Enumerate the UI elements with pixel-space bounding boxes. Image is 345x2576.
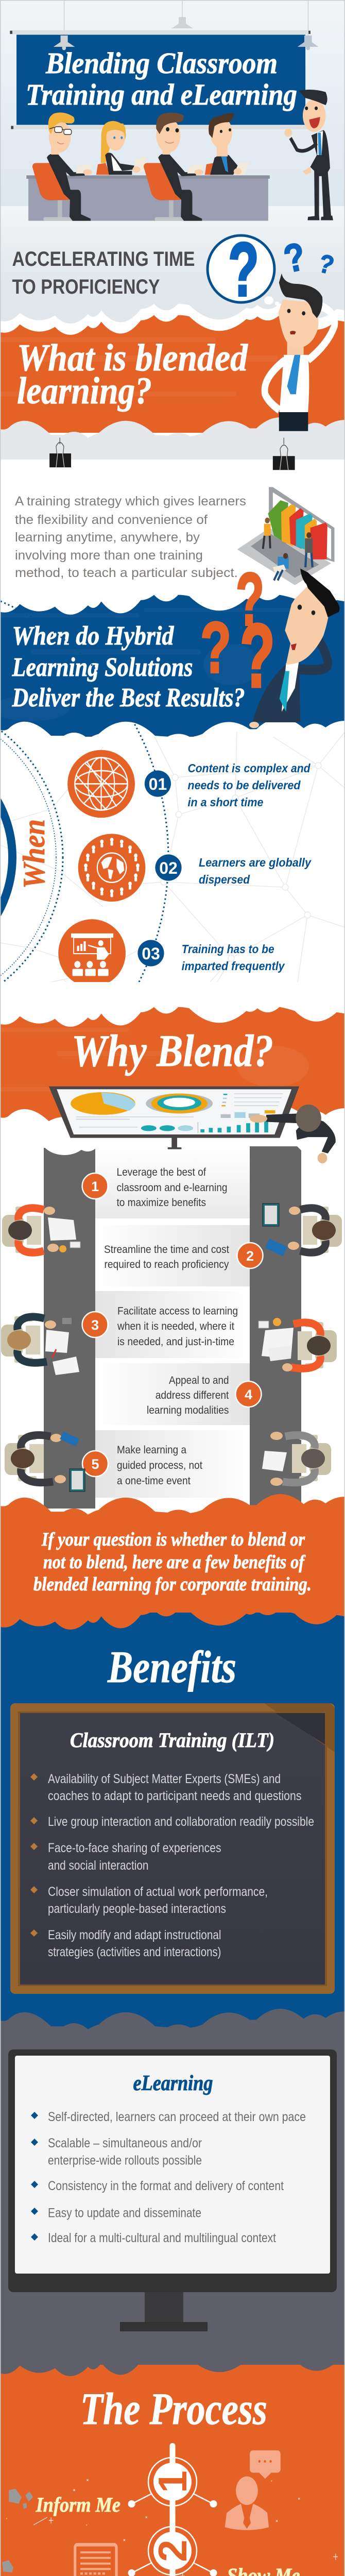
illustration: person touching monitor	[250, 1105, 336, 1163]
illustration: seated students	[32, 112, 249, 221]
icon: thought bubble with question marks	[208, 227, 337, 312]
decorative rocks	[2, 2489, 336, 2576]
badges: numbers 1 to 5	[82, 1173, 263, 1477]
icon: speaker person	[225, 2477, 269, 2530]
illustration: trousers of puzzled man	[279, 412, 308, 428]
heading: why blend: Why Blend?	[72, 1026, 273, 1076]
list: elearning benefits: Self-directed, learners can proceed at their own pace	[48, 2110, 306, 2124]
heading: accelerating time to proficiency	[12, 248, 195, 298]
illustration: presenter	[284, 90, 333, 221]
list: why blend reasons: Appeal to and	[169, 1375, 229, 1386]
illustration: meeting participant grey right	[262, 1432, 331, 1486]
diagram: dotted and solid arcs	[0, 578, 168, 1137]
icon: content network sphere	[67, 750, 135, 818]
list: why blend reasons: classroom and e-learning	[116, 1182, 228, 1194]
badges: numbers 1 to 5: 5	[91, 1456, 99, 1472]
diagram: process timeline	[128, 2443, 217, 2576]
text: if your question: If your question is whether to blend or	[41, 1529, 305, 1550]
text: if your question: blended learning for corporate training.	[33, 1574, 312, 1595]
text: learners dispersed: Learners are globally	[199, 856, 312, 869]
heading: accelerating time to proficiency: TO PROFICIENCY	[12, 276, 160, 298]
title: Training and eLearning	[26, 78, 297, 111]
labels: process steps: Inform Me	[36, 2493, 120, 2516]
illustration: wall monitor with charts	[49, 1087, 299, 1149]
list: elearning benefits: Consistency in the format and delivery of content	[48, 2179, 284, 2193]
illustration: meeting participant teal left	[1, 1316, 79, 1375]
illustration: classroom desk	[26, 175, 270, 221]
text block: definition of blended learning: method, to teach a particular subject.	[15, 566, 238, 580]
heading: benefits: Benefits	[107, 1642, 236, 1692]
list: classroom benefits: Face-to-face sharing of experiences	[48, 1841, 221, 1855]
text block: definition of blended learning: learning anytime, anywhere, by	[15, 530, 200, 545]
list: why blend reasons: a one-time event	[117, 1475, 191, 1487]
icon: binder clips	[49, 437, 295, 470]
list: classroom benefits: particularly people-based interactions	[48, 1902, 226, 1916]
panel: orange what is blended learning band	[0, 279, 345, 433]
badges: numbers 1 to 5: 4	[245, 1387, 252, 1402]
illustration: worried man with question marks: ?	[200, 607, 231, 688]
text: training frequently	[182, 942, 285, 973]
ceiling lights and rods	[64, 0, 308, 36]
badge: 02: 02	[159, 859, 178, 877]
text: learners dispersed: dispersed	[199, 873, 250, 886]
illustration: laptop with books	[237, 487, 334, 585]
icon: presenter with audience	[58, 919, 126, 987]
icon: speech bubble	[250, 2450, 281, 2479]
labels: process steps	[12, 2493, 307, 2576]
list: classroom benefits: strategies (activities and interactions)	[48, 1945, 221, 1959]
decorative stars and dots	[6, 2479, 343, 2576]
list: elearning benefits: Scalable – simultaneous and/or	[48, 2136, 202, 2150]
icon: globe and people	[78, 834, 145, 902]
list: why blend reasons: to maximize benefits	[116, 1197, 206, 1209]
list: why blend reasons: Facilitate access to learning	[117, 1306, 238, 1317]
list: why blend reasons: Leverage the best of	[116, 1166, 206, 1178]
badges: numbers 1 to 5: 1	[91, 1179, 99, 1194]
icon: tablet with hand	[75, 2545, 120, 2576]
list: why blend reasons	[104, 1166, 238, 1487]
panel: grey band above definition	[0, 417, 345, 614]
list: classroom benefits: coaches to adapt to participant needs and questions	[48, 1789, 302, 1803]
text: training frequently: Training has to be	[182, 942, 274, 956]
heading: when do hybrid learning solutions deliver the best results: When do Hybrid	[12, 621, 174, 651]
icon: thought bubble with question marks: ?	[228, 227, 259, 312]
list: elearning benefits: enterprise-wide rollouts possible	[48, 2154, 202, 2168]
title	[26, 46, 297, 111]
badge: 03: 03	[142, 944, 160, 963]
heading: accelerating time to proficiency: ACCELERATING TIME	[12, 248, 195, 270]
panel: elearning monitor	[8, 2049, 337, 2334]
illustration: meeting participant red right	[258, 1318, 337, 1371]
text block: definition of blended learning	[15, 494, 246, 580]
badge: 01: 01	[149, 775, 167, 793]
illustration: worried man with question marks: ?	[240, 606, 275, 706]
illustration: meeting participant red left	[2, 1207, 80, 1253]
list: why blend reasons: learning modalities	[147, 1404, 229, 1416]
list: classroom benefits: Availability of Subject Matter Experts (SMEs) and	[48, 1772, 281, 1786]
illustration: meeting participant dark left with tablet	[5, 1432, 85, 1492]
text block: definition of blended learning: involving more than one training	[15, 548, 203, 563]
list: why blend reasons: guided process, not	[117, 1460, 202, 1471]
title: Blending Classroom	[45, 46, 278, 80]
step 1	[128, 2458, 217, 2507]
text: training frequently: imparted frequently	[182, 959, 285, 973]
panel: white spacer above orange why blend band	[0, 992, 345, 1008]
text block: definition of blended learning: the flexibility and convenience of	[15, 513, 208, 527]
list: why blend reasons: when it is needed, where it	[117, 1320, 234, 1332]
panel: blue when do hybrid band	[0, 570, 345, 776]
timeline stem	[170, 2443, 175, 2576]
text: if your question: not to blend, here are a few benefits of	[43, 1552, 306, 1573]
text: content is complex: needs to be delivered	[187, 778, 301, 792]
badges: numbers 1 to 5: 3	[91, 1317, 99, 1333]
projection banner	[10, 30, 318, 129]
heading: classroom training ILT: Classroom Training (ILT)	[70, 1728, 274, 1752]
panel: orange question band with blue below	[0, 1494, 345, 2040]
badges: numbers 1 to 5: 2	[246, 1248, 254, 1264]
list: why blend reasons: is needed, and just-in-time	[117, 1336, 234, 1348]
panel: grey elearning band	[0, 2009, 345, 2370]
list: classroom benefits: Easily modify and adapt instructional	[48, 1928, 221, 1942]
heading: what is blended learning: learning?	[17, 370, 152, 412]
badge: 03	[137, 940, 164, 967]
panel: orange why blend band	[0, 982, 345, 1525]
illustration: meeting participant dark right with tablet	[263, 1204, 342, 1256]
badge: 02	[155, 854, 182, 881]
list: elearning benefits	[48, 2110, 306, 2245]
panel: classroom training blackboard	[10, 1703, 335, 1994]
bullet diamonds	[31, 2112, 38, 2241]
text: learners dispersed	[199, 856, 312, 886]
list: classroom benefits: and social interaction	[48, 1858, 148, 1873]
icon: thought bubble with question marks: ?	[316, 248, 337, 280]
text: if your question	[33, 1529, 312, 1595]
list: classroom benefits	[48, 1772, 314, 1959]
list: why blend reasons: Streamline the time and cost	[104, 1244, 229, 1256]
label: when: When	[17, 819, 51, 889]
heading: what is blended learning	[17, 337, 248, 412]
illustration: puzzled man	[265, 274, 335, 431]
bullet diamonds	[30, 1773, 38, 1937]
list: why blend reasons: address different	[156, 1389, 229, 1401]
diagram: network background	[0, 732, 345, 992]
text block: definition of blended learning: A training strategy which gives learners	[15, 494, 246, 509]
list: why blend reasons: required to reach proficiency	[104, 1259, 229, 1270]
list: elearning benefits: Easy to update and disseminate	[48, 2206, 201, 2221]
step 1: 1	[150, 2470, 195, 2493]
heading: what is blended learning: What is blended	[17, 337, 248, 379]
text: content is complex: in a short time	[187, 795, 264, 809]
heading: when do hybrid learning solutions deliver the best results	[12, 621, 245, 713]
list: why blend reasons: Make learning a	[117, 1444, 186, 1456]
panel: orange process band	[0, 2331, 345, 2576]
section: header classroom background	[0, 0, 345, 312]
heading: elearning: eLearning	[133, 2072, 213, 2095]
illustration: worried man with question marks	[200, 557, 339, 728]
badge: 01	[145, 770, 171, 797]
illustration: worried man with question marks: ?	[236, 557, 264, 641]
heading: the process: The Process	[80, 2384, 267, 2434]
text: content is complex	[187, 761, 310, 809]
text: content is complex: Content is complex and	[187, 761, 310, 775]
heading: when do hybrid learning solutions deliver the best results: Deliver the Best Results?	[12, 683, 245, 713]
step 2	[128, 2527, 217, 2576]
list: elearning benefits: Ideal for a multi-cultural and multilingual context	[48, 2231, 276, 2245]
heading: when do hybrid learning solutions deliver the best results: Learning Solutions	[12, 653, 193, 682]
step 2: 2	[150, 2539, 195, 2562]
panel: conference table	[40, 1117, 301, 1509]
list: classroom benefits: Closer simulation of actual work performance,	[48, 1885, 268, 1899]
icon: thought bubble with question marks: ?	[280, 234, 309, 281]
